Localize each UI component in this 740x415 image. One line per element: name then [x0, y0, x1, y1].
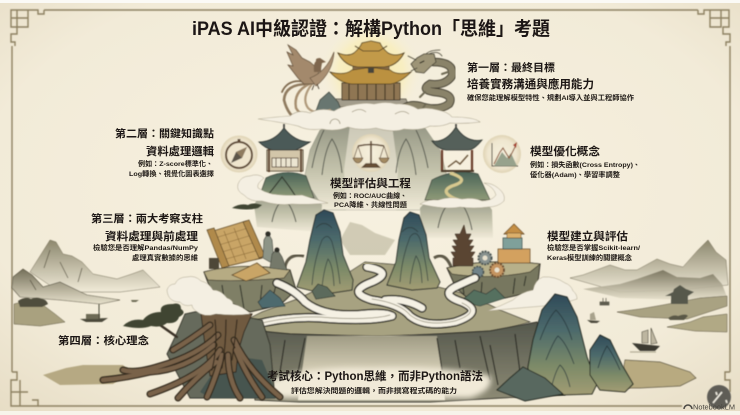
artwork: distant landscape left — [12, 240, 160, 326]
text block: level three — [91, 212, 204, 262]
text block: level one: 確保您能理解模型特性、規劃AI導入並與工程師協作 — [467, 93, 634, 102]
upper misty mountains — [304, 118, 448, 210]
icon: compass — [220, 136, 258, 172]
text block: level three: 處理真實數據的思維 — [132, 253, 198, 262]
text block: level two: Log轉換、視覺化圖表選擇 — [129, 169, 214, 178]
platform left with scroll and scholars — [204, 220, 296, 312]
illustration: left pavilion — [254, 124, 322, 232]
ancient tree and left cliff — [103, 304, 280, 398]
text block: exam core — [267, 369, 483, 395]
bottom left ground — [43, 365, 130, 385]
text block: exam core: 評估您解決問題的邏輯，而非撰寫程式碼的能力 — [291, 386, 457, 395]
text block: level one: 培養實務溝通與應用能力 — [467, 77, 594, 91]
clouds mid level — [238, 175, 504, 208]
distant mist peaks center — [340, 222, 395, 255]
lower cliffs — [250, 322, 565, 402]
text block: level one: 第一層：最終目標 — [467, 61, 556, 74]
text block: model building: Keras模型訓練的關鍵概念 — [547, 253, 632, 262]
stone bridges — [284, 255, 453, 272]
text block: model evaluation: 例如：ROC/AUC曲線、 — [333, 191, 407, 200]
small pine on upper left — [232, 204, 262, 210]
illustration: right pavilion — [420, 124, 493, 238]
tall blue peak right — [387, 212, 440, 290]
sun glow behind temple — [321, 22, 421, 122]
watermark button — [707, 385, 731, 409]
winding river — [250, 267, 475, 326]
text block: model building: 模型建立與評估 — [547, 229, 628, 243]
text block: level two: 資料處理邏輯 — [146, 144, 214, 158]
illustration: imperial palace — [330, 41, 411, 107]
icon: boat left — [80, 300, 139, 322]
text block: model optimisation: 模型優化概念 — [530, 144, 600, 158]
text block: model optimisation — [530, 144, 640, 179]
text block: model building — [547, 229, 640, 262]
text block: model evaluation: 模型評估與工程 — [330, 176, 411, 190]
illustration: phoenix — [282, 45, 334, 122]
text block: level two: 例如：Z-score標準化、 — [138, 159, 213, 168]
text block: level three: 資料處理與前處理 — [105, 229, 198, 243]
mist behind exam core text — [262, 368, 491, 398]
ground plateau — [236, 262, 530, 336]
platform right with pagoda gears and gate — [447, 224, 540, 306]
text block: model evaluation: PCA降維、共線性問題 — [334, 200, 407, 209]
text block: level two: 第二層：關鍵知識點 — [115, 127, 215, 140]
icon: scales of justice — [352, 134, 390, 172]
text block: model optimisation: 優化器(Adam)、學習率調整 — [530, 170, 620, 179]
NotebookLM logo: NotebookLM — [693, 402, 735, 412]
text block: model evaluation — [330, 176, 411, 209]
text block: model building: 檢驗您是否掌握Scikit-learn/ — [547, 243, 640, 252]
text block: exam core: 考試核心：Python思維，而非Python語法 — [267, 369, 483, 383]
illustration: dragon — [399, 50, 452, 118]
tall blue peak left — [297, 210, 353, 299]
text block: level one — [467, 61, 634, 102]
small peaks under phoenix and dragon — [312, 92, 430, 122]
text block: level three: 第三層：兩大考察支柱 — [91, 212, 204, 225]
text block: level three: 檢驗您是否理解Pandas/NumPy — [93, 243, 198, 252]
icon: boats right — [587, 298, 660, 352]
text block: level four: 第四層：核心理念 — [58, 334, 150, 347]
clouds under palace — [258, 102, 480, 131]
title: iPAS AI中級認證：解構Python「思維」考題 — [192, 17, 550, 40]
text block: model optimisation: 例如：損失函數(Cross Entropy)、 — [530, 160, 640, 169]
icon: line chart — [483, 135, 521, 173]
cloud right of platform — [487, 277, 577, 311]
text block: level two — [115, 127, 215, 178]
artwork: distant landscape right — [570, 240, 728, 388]
big blue mountains lower right — [497, 294, 633, 401]
cloud left of tree — [167, 276, 250, 315]
